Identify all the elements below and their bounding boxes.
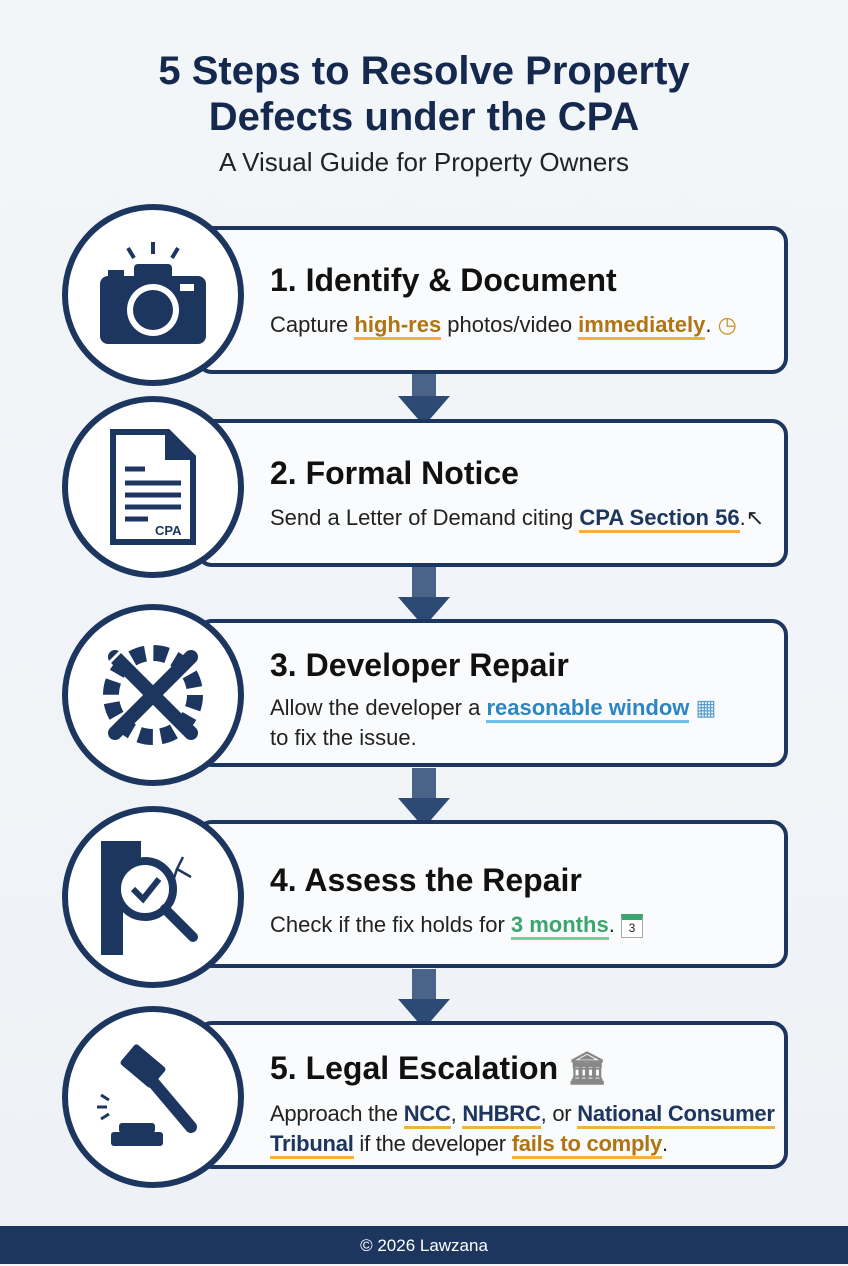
title: 5 Steps to Resolve Property (158, 49, 690, 93)
footer (0, 1226, 848, 1264)
heading 5: 5. Legal Escalation 🏛 (270, 1050, 608, 1086)
text 4: 3 (629, 921, 635, 935)
heading 2: 2. Formal Notice (270, 455, 519, 491)
icon: document (62, 396, 244, 578)
panel: step 5 (196, 1021, 788, 1169)
text 5: Tribunal if the developer fails to comply. (270, 1131, 668, 1156)
text 5: Approach the NCC, NHBRC, or National Consumer (270, 1101, 775, 1126)
icon: camera (62, 204, 244, 386)
subtitle: A Visual Guide for Property Owners (219, 147, 629, 177)
text 2: Send a Letter of Demand citing CPA Section 56.↖ (270, 505, 764, 530)
arrow 1 (398, 374, 450, 419)
text 3: to fix the issue. (270, 725, 417, 750)
heading 4: 4. Assess the Repair (270, 862, 582, 898)
text 3: Allow the developer a reasonable window ▦ (270, 695, 716, 720)
heading 3: 3. Developer Repair (270, 647, 569, 683)
panel: step 2 (196, 419, 788, 567)
title (158, 49, 690, 139)
icon: tools (62, 604, 244, 786)
panel: step 1 (196, 226, 788, 374)
panel: step 3 (196, 619, 788, 767)
panel: step 4 (196, 820, 788, 968)
arrow 3 (398, 768, 450, 820)
icon: document: CPA (155, 523, 182, 538)
heading 1: 1. Identify & Document (270, 262, 617, 298)
text 4: Check if the fix holds for 3 months. (270, 912, 615, 937)
title: Defects under the CPA (209, 95, 639, 139)
text 1: Capture high-res photos/video immediately. ◷ (270, 312, 737, 337)
icon: gavel (62, 1006, 244, 1188)
footer: © 2026 Lawzana (360, 1236, 488, 1255)
text 3 (270, 695, 716, 750)
icon: magnifier (62, 806, 244, 988)
arrow 2 (398, 567, 450, 619)
arrow 4 (398, 969, 450, 1021)
text 5 (270, 1101, 775, 1159)
